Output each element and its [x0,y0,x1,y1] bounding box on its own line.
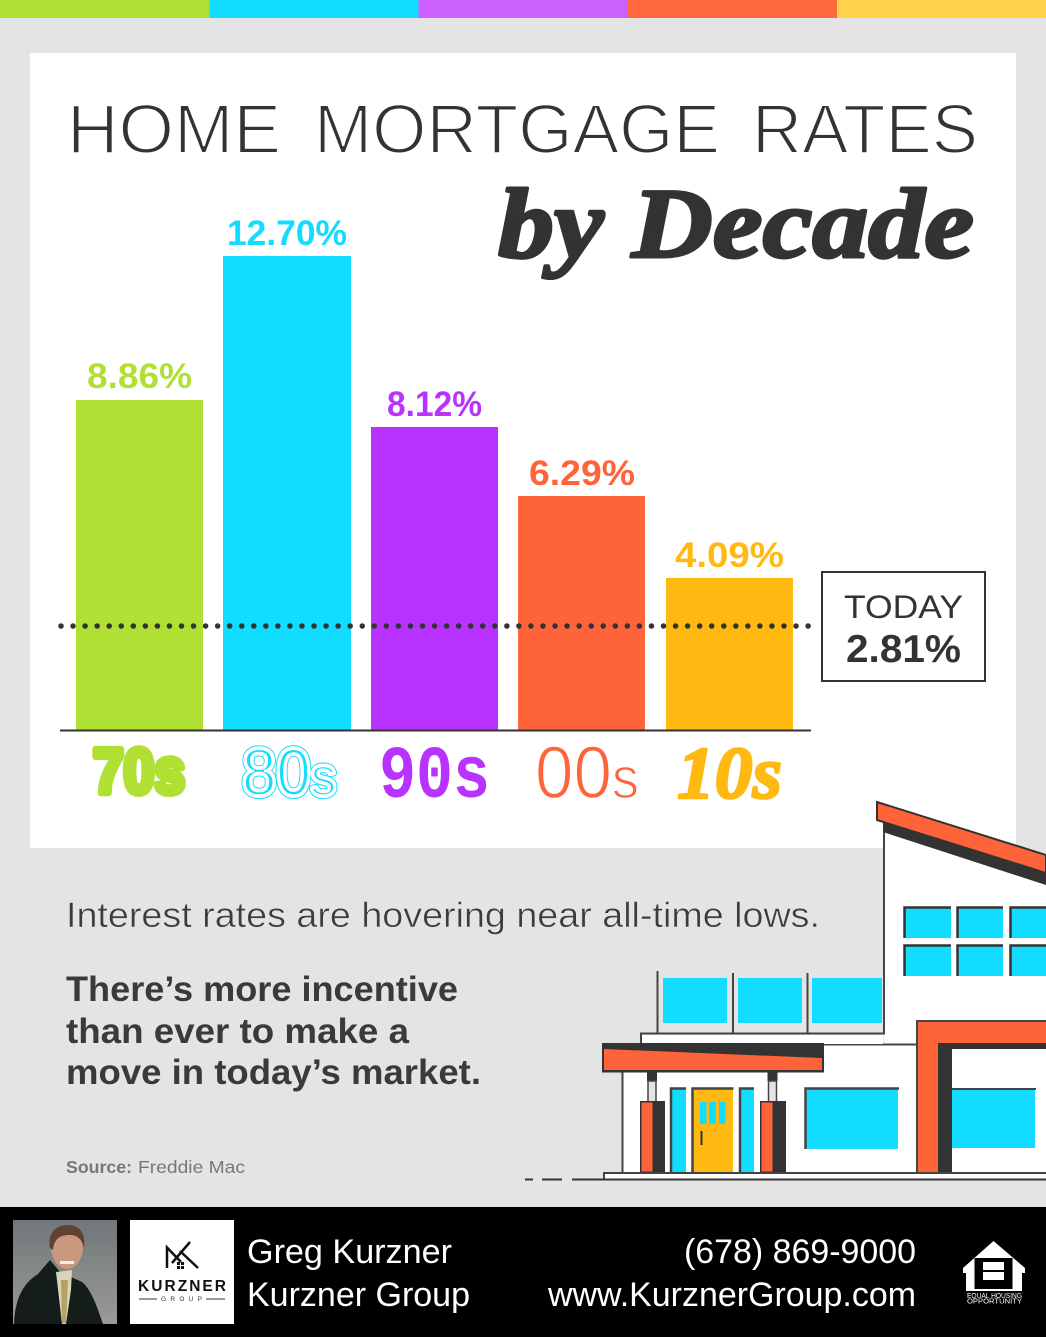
bar: 00s: 6.29% [529,454,635,493]
bar: 70s: 8.86% [87,357,192,396]
panel: chart card [30,53,1016,848]
porch pillars [640,1072,786,1172]
Kurzner Group logo: KURZNER [138,1278,226,1295]
Kurzner Group logo: GROUP [161,1296,202,1303]
front door [692,1088,734,1172]
bar: 90s [371,385,498,730]
top colour stripe [0,0,1046,18]
bar: 80s [223,214,351,730]
title: by Decade [498,168,974,279]
decade label: 70s: 70s [93,737,185,807]
decade label: 10s: 10s [677,733,782,815]
text: incentive message: There’s more incentive [66,970,458,1009]
icon: equal housing opportunity: EQUAL HOUSING [967,1293,1022,1300]
agent name: Kurzner Group [247,1276,470,1314]
balcony glass [658,971,882,1033]
house body [622,826,1046,1173]
title: HOME [67,90,281,168]
upper windows [904,908,1046,976]
text: source [66,1157,245,1177]
title: MORTGAGE [314,90,720,168]
ground line [525,1173,1046,1180]
title: RATES [752,90,978,168]
decade label: 80s: 80s [242,735,336,809]
decade label: 90s: 90s [379,736,490,820]
front window [806,1088,899,1149]
bar: 90s: 8.12% [387,385,482,424]
agent name: Greg Kurzner [247,1233,452,1271]
text: incentive message: move in today’s market. [66,1053,481,1092]
contact details: (678) 869-9000 [684,1233,916,1271]
bar: 70s [76,357,203,730]
footer bar [0,1207,1046,1337]
text: source: Source: [66,1157,132,1177]
agent photo [13,1220,117,1324]
decade label: 80s: 80s [242,735,336,809]
text: source: Freddie Mac [138,1157,245,1177]
decade label: 80s: 80s [242,735,336,809]
callout: today rate: 2.81% [846,628,961,671]
title [67,90,978,279]
Kurzner Group logo [130,1220,234,1324]
callout: today rate [822,572,985,681]
bar: 00s [518,454,645,730]
icon: equal housing opportunity [963,1241,1025,1306]
bar: 10s [666,536,793,730]
text: incentive message [66,970,481,1092]
garage frame [917,1021,1046,1172]
callout: today rate: TODAY [844,589,963,625]
bar: 80s: 12.70% [227,214,347,253]
sidelights [671,1088,754,1172]
bar: 10s: 4.09% [675,536,784,575]
roof [877,802,1046,885]
contact details: www.KurznerGroup.com [547,1276,916,1314]
text: incentive message: than ever to make a [66,1012,410,1051]
decade label: 00s: 00s [535,731,639,814]
porch awning [602,1043,824,1072]
illustration: modern house [525,802,1046,1180]
contact details [547,1233,916,1314]
bar chart [60,214,811,732]
agent name [247,1233,470,1314]
text: intro sentence: Interest rates are hovering near all-time lows. [66,896,820,935]
icon: equal housing opportunity: OPPORTUNITY [967,1298,1022,1306]
